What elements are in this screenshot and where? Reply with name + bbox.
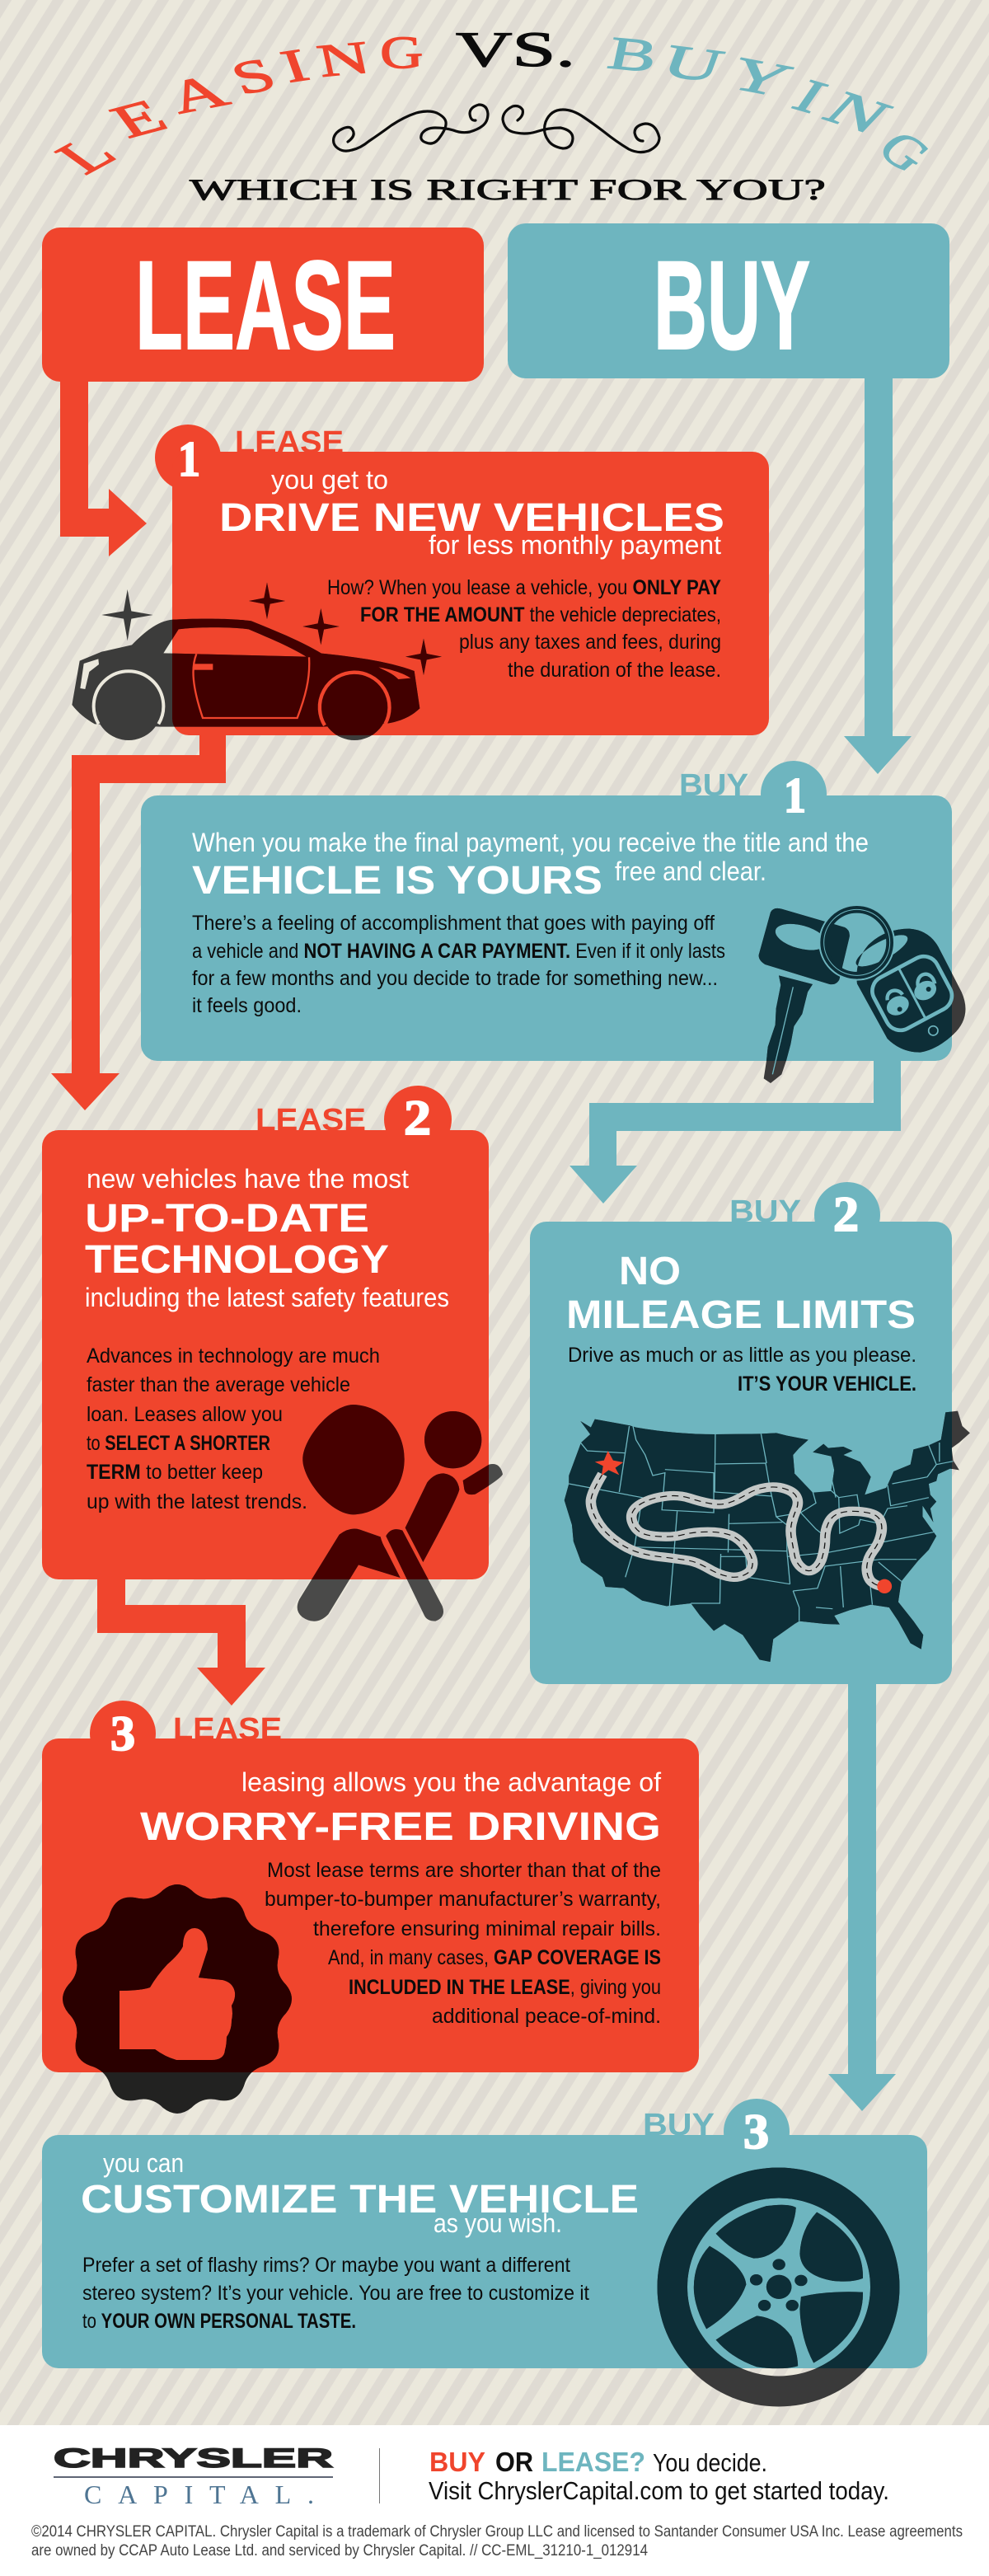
- call to action: You decide.: [653, 2448, 767, 2477]
- footer: [0, 2425, 989, 2576]
- decorative flourish: [334, 105, 659, 152]
- panel: buy 2: Drive as much or as little as you please.: [568, 1344, 916, 1367]
- panel: buy 2: [530, 1182, 952, 1684]
- panel: buy 1: VEHICLE IS YOURS: [192, 859, 602, 903]
- logo: Chrysler Capital: [54, 2443, 333, 2509]
- panel: lease 2: UP-TO-DATE: [85, 1197, 369, 1241]
- badge: buy 2: BUY: [729, 1194, 801, 1229]
- text block: lease 2 body: Advances in technology are much: [87, 1344, 380, 1368]
- panel: buy 3: [42, 2099, 927, 2368]
- subtitle: WHICH IS RIGHT FOR YOU?: [190, 173, 826, 206]
- call to action: OR: [495, 2447, 533, 2477]
- text block: lease 1 body: plus any taxes and fees, during: [459, 631, 721, 654]
- text block: lease 1 body: the duration of the lease.: [508, 659, 721, 682]
- panel: buy 3: CUSTOMIZE THE VEHICLE: [81, 2178, 639, 2222]
- call to action: LEASE?: [541, 2447, 645, 2477]
- panel: buy 3: 3: [743, 2104, 769, 2159]
- panel: lease 2: TECHNOLOGY: [85, 1238, 389, 1282]
- text block: lease 2 body: to SELECT A SHORTER: [87, 1432, 270, 1455]
- header box: LEASE: [42, 228, 484, 382]
- header box: BUY: BUY: [654, 235, 810, 376]
- text block: buy 1 body: There’s a feeling of accomplishment that goes with paying off: [192, 912, 715, 935]
- panel: lease 3: WORRY-FREE DRIVING: [140, 1805, 661, 1849]
- panel: lease 3: [42, 1701, 699, 2072]
- text block: lease 3 body: therefore ensuring minimal repair bills.: [313, 1917, 661, 1940]
- icon: thumbs-up seal: [63, 1884, 292, 2114]
- panel: buy 1: [141, 761, 952, 1061]
- legal text: are owned by CCAP Auto Lease Ltd. and serviced by Chrysler Capital. // CC-EML_31210-1_012914: [31, 2542, 648, 2560]
- text block: buy 3 body: Prefer a set of flashy rims? Or maybe you want a different: [82, 2254, 570, 2277]
- badge: buy 3: BUY: [643, 2108, 715, 2142]
- badge: lease 2: [255, 1086, 452, 1153]
- icon: shiny car: [72, 583, 442, 740]
- title word: Buying: B: [604, 27, 659, 85]
- title word: Leasing: G: [379, 26, 424, 79]
- text block: lease 3 body: [265, 1859, 661, 2028]
- title word: Leasing: A: [166, 58, 237, 124]
- text block: lease 3 body: And, in many cases, GAP COVERAGE IS: [328, 1946, 661, 1969]
- text block: lease 2 body: TERM to better keep: [87, 1461, 263, 1484]
- panel: lease 1: [155, 425, 769, 735]
- icon: airbag and seated person: [298, 1405, 503, 1621]
- text block: buy 3 body: [82, 2254, 589, 2333]
- panel: lease 3: 3: [110, 1706, 135, 1761]
- text block: buy 1 body: it feels good.: [192, 994, 302, 1017]
- badge: lease 1: LEASE: [235, 425, 344, 460]
- text block: lease 3 body: additional peace-of-mind.: [432, 2005, 661, 2028]
- title word: Buying: Y: [721, 48, 792, 115]
- panel: lease 1: for less monthly payment: [429, 530, 721, 560]
- panel: buy 1: When you make the final payment, you receive the title and the: [192, 828, 869, 857]
- badge: lease 2: LEASE: [255, 1103, 366, 1138]
- text block: lease 1 body: [327, 576, 721, 682]
- text block: lease 1 body: How? When you lease a vehicle, you ONLY PAY: [327, 576, 721, 599]
- legal text: [31, 2523, 963, 2560]
- panel: lease 3: leasing allows you the advantage of: [241, 1767, 661, 1797]
- badge: buy 1: [679, 761, 827, 827]
- title word: Leasing: S: [230, 45, 283, 105]
- title word: Buying: I: [785, 70, 827, 127]
- title word: Leasing: E: [111, 82, 175, 148]
- text block: lease 2 body: [87, 1344, 380, 1513]
- icon: tire and rim: [658, 2168, 900, 2407]
- badge: buy 3: [643, 2099, 790, 2165]
- text block: buy 1 body: a vehicle and NOT HAVING A CAR PAYMENT. Even if it only lasts: [192, 940, 725, 963]
- badge: lease 3: [90, 1701, 282, 1767]
- text block: buy 3 body: stereo system? It’s your vehicle. You are free to customize it: [82, 2282, 589, 2305]
- title word: vs.: VS.: [456, 22, 575, 77]
- logo: Chrysler Capital: CHRYSLER: [54, 2443, 333, 2473]
- panel: lease 1: DRIVE NEW VEHICLES: [219, 496, 724, 540]
- text block: lease 2 body: up with the latest trends.: [87, 1490, 307, 1513]
- text block: lease 2 body: loan. Leases allow you: [87, 1403, 283, 1426]
- call to action: [429, 2447, 889, 2505]
- icon: car keys and remote fob: [759, 905, 966, 1083]
- text block: lease 2 body: faster than the average vehicle: [87, 1373, 350, 1396]
- panel: lease 2: [42, 1086, 489, 1579]
- panel: lease 1: you get to: [271, 465, 388, 495]
- panel: buy 3: you can: [103, 2148, 184, 2178]
- title word: Buying: U: [657, 35, 724, 97]
- badge: lease 1: [155, 425, 344, 490]
- panel: lease 2: 2: [404, 1091, 431, 1145]
- title word: Buying: G: [868, 122, 934, 188]
- title word: Leasing: L: [59, 115, 126, 184]
- panel: buy 1: 1: [784, 768, 806, 823]
- arrow: lease 1 to lease 2: [51, 735, 226, 1110]
- badge: lease 3: LEASE: [173, 1712, 282, 1747]
- text block: lease 1 body: FOR THE AMOUNT the vehicle depreciates,: [360, 603, 721, 626]
- title word: Leasing: N: [316, 30, 373, 87]
- title word: Leasing: I: [279, 38, 314, 93]
- panel: buy 2: IT’S YOUR VEHICLE.: [738, 1372, 916, 1396]
- title word: Buying: N: [815, 82, 889, 155]
- call to action: Visit ChryslerCapital.com to get started today.: [429, 2476, 889, 2505]
- panel: buy 2: NO: [619, 1250, 681, 1293]
- arrow: lease header to lease 1: [60, 382, 147, 556]
- text block: lease 3 body: bumper-to-bumper manufacturer’s warranty,: [265, 1888, 661, 1911]
- panel: lease 2: new vehicles have the most: [87, 1164, 409, 1194]
- panel: lease 2: including the latest safety features: [85, 1283, 449, 1312]
- header box: LEASE: LEASE: [135, 235, 396, 376]
- badge: buy 2: [729, 1182, 880, 1248]
- panel: buy 1: free and clear.: [615, 856, 766, 886]
- panel: buy 2: 2: [833, 1187, 859, 1241]
- panel: buy 2: MILEAGE LIMITS: [566, 1293, 916, 1337]
- panel: buy 3: as you wish.: [434, 2208, 562, 2238]
- map: United States with road route: [565, 1411, 970, 1662]
- header box: BUY: [508, 223, 949, 378]
- badge: buy 1: BUY: [679, 768, 748, 803]
- arrow: buy header to buy 1: [844, 378, 912, 774]
- call to action: BUY: [429, 2447, 485, 2477]
- panel: lease 1: 1: [178, 432, 200, 486]
- arrow: buy 1 to buy 2: [569, 1061, 901, 1204]
- text block: buy 1 body: for a few months and you decide to trade for something new...: [192, 967, 718, 990]
- arrow: lease 2 to lease 3: [97, 1579, 265, 1706]
- arrow: buy 2 to buy 3: [828, 1684, 896, 2111]
- text block: buy 1 body: [192, 912, 725, 1017]
- title: [59, 22, 934, 188]
- logo: Chrysler Capital: CAPITAL.: [84, 2480, 314, 2509]
- text block: lease 3 body: Most lease terms are shorter than that of the: [267, 1859, 661, 1882]
- text block: lease 3 body: INCLUDED IN THE LEASE, giving you: [349, 1976, 661, 1999]
- text block: buy 3 body: to YOUR OWN PERSONAL TASTE.: [82, 2310, 356, 2333]
